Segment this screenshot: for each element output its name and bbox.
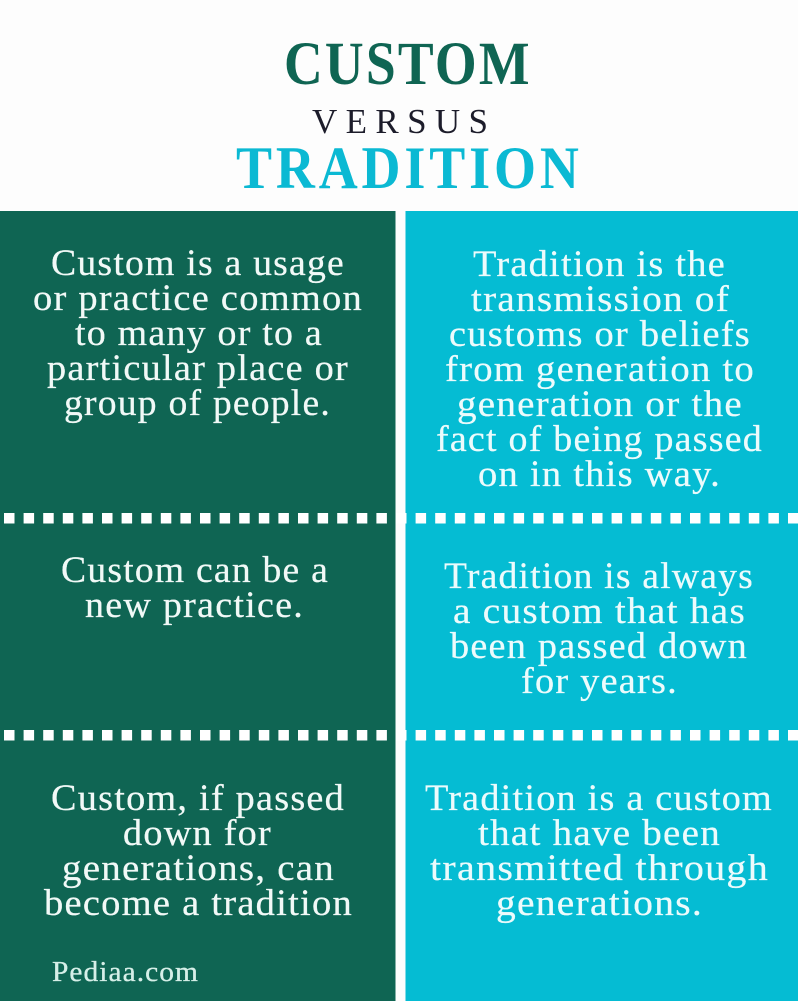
text: custom can become tradition: generations, can: [62, 848, 335, 889]
dotted divider: upper: [4, 513, 798, 524]
dotted divider: lower: [4, 730, 798, 740]
text: tradition transmitted: generations.: [496, 883, 703, 924]
text: tradition definition: transmission of: [471, 279, 730, 320]
text: tradition always passed down: for years.: [521, 661, 678, 702]
text: custom definition: [33, 243, 363, 424]
text: tradition definition: [436, 244, 763, 495]
text: custom definition: group of people.: [64, 383, 331, 424]
text: tradition definition: fact of being passed: [436, 419, 763, 460]
text: tradition definition: Tradition is the: [473, 244, 726, 285]
text: custom can be new: [61, 550, 329, 626]
text: tradition always passed down: a custom that has: [453, 591, 746, 632]
text: custom definition: particular place or: [47, 348, 349, 389]
text: custom can become tradition: become a tradition: [44, 883, 353, 924]
text: custom can become tradition: Custom, if passed: [51, 778, 345, 819]
text: tradition transmitted: transmitted through: [430, 848, 769, 889]
text: tradition transmitted: that have been: [478, 813, 721, 854]
text: tradition transmitted: Tradition is a custom: [425, 778, 773, 819]
logo: Pediaa.com: Pediaa.com: [52, 957, 199, 988]
title: CUSTOM: [284, 31, 530, 98]
panel: custom column: [0, 211, 396, 1001]
text: custom can become tradition: [44, 778, 353, 924]
text: custom can be new: Custom can be a: [61, 550, 329, 591]
text: tradition always passed down: been passed down: [450, 626, 748, 667]
title: [236, 31, 579, 202]
text: custom definition: to many or to a: [75, 313, 323, 354]
text: custom definition: Custom is a usage: [51, 243, 345, 284]
text: tradition definition: generation or the: [457, 384, 743, 425]
text: custom can be new: new practice.: [85, 585, 304, 626]
panel: tradition column: [406, 211, 798, 1001]
text: tradition definition: customs or beliefs: [449, 314, 751, 355]
text: tradition transmitted: [425, 778, 773, 924]
text: tradition always passed down: Tradition is always: [444, 556, 754, 597]
text: tradition always passed down: [444, 556, 754, 702]
title: VERSUS: [312, 102, 488, 141]
text: tradition definition: on in this way.: [478, 454, 721, 495]
title: TRADITION: [236, 135, 579, 202]
text: tradition definition: from generation to: [445, 349, 755, 390]
text: custom can become tradition: down for: [123, 813, 272, 854]
text: custom definition: or practice common: [33, 278, 363, 319]
